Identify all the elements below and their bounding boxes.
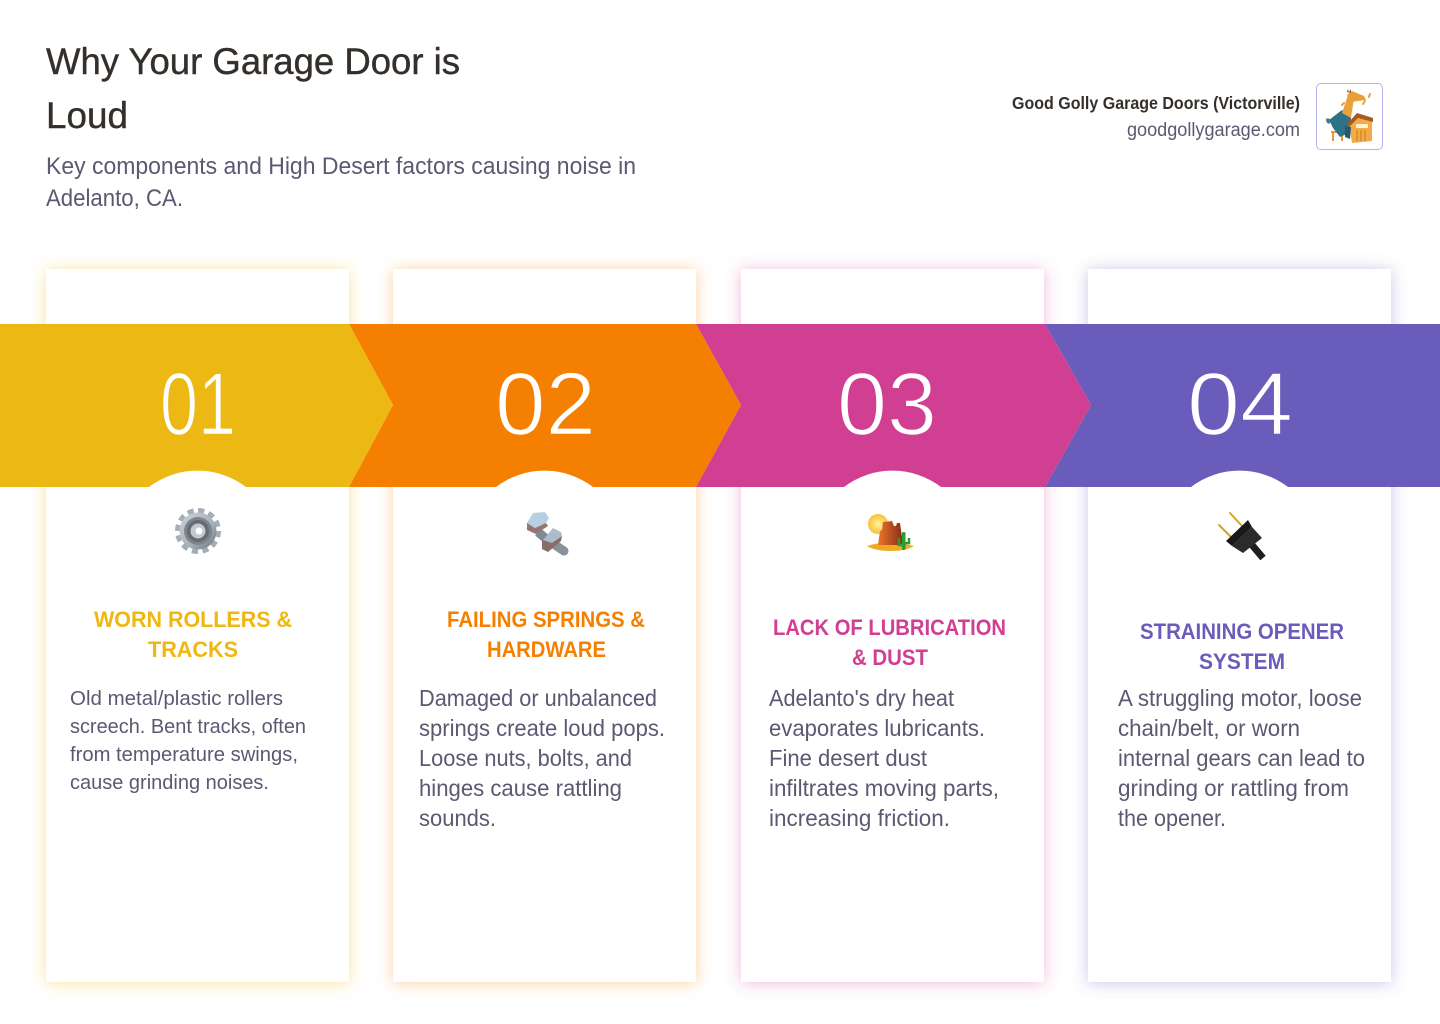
text: card 1 body (70, 687, 306, 794)
icon dome 2 (496, 471, 593, 487)
company name and website (1012, 93, 1300, 141)
text: card 3 body: increasing friction. (769, 805, 950, 831)
text: card 1 body: cause grinding noises. (70, 771, 269, 794)
heading: card 3: LACK OF LUBRICATION (773, 615, 1006, 640)
title: Loud (46, 95, 128, 136)
step number 03: 03 (837, 354, 937, 454)
icon dome 4 (1191, 471, 1288, 487)
text: card 4 body: chain/belt, or worn (1118, 715, 1300, 741)
heading: card 3: & DUST (852, 645, 929, 670)
text: card 1 body: screech. Bent tracks, often (70, 715, 306, 738)
text: card 2 body: Loose nuts, bolts, and (419, 745, 632, 771)
step number 01: 01 (160, 354, 236, 454)
panel: card 1 background (46, 269, 349, 982)
text: card 3 body: Fine desert dust (769, 745, 928, 771)
heading: card 1: TRACKS (148, 637, 238, 662)
arrow: step 3 band (696, 324, 1091, 487)
text: card 2 body: springs create loud pops. (419, 715, 665, 741)
icon: electrical plug (1219, 513, 1263, 558)
text: card 2 body (419, 685, 665, 831)
step number 02: 02 (495, 354, 596, 454)
text: card 3 body: evaporates lubricants. (769, 715, 985, 741)
heading: card 4: SYSTEM (1199, 649, 1285, 674)
icon dome 3 (844, 471, 941, 487)
heading: card 4: STRAINING OPENER (1140, 619, 1344, 644)
panel: card 3 background (741, 269, 1044, 982)
icon: desert butte with sun and cactus (867, 514, 914, 551)
company name and website: goodgollygarage.com (1127, 120, 1300, 141)
icon: gear (178, 511, 218, 551)
text: card 2 body: sounds. (419, 805, 496, 831)
text: card 4 body: A struggling motor, loose (1118, 685, 1362, 711)
text: card 1 body: Old metal/plastic rollers (70, 687, 283, 710)
heading: card 2: FAILING SPRINGS & (447, 607, 645, 632)
company name and website: Good Golly Garage Doors (Victorville) (1012, 93, 1300, 113)
subtitle (46, 153, 636, 212)
title (46, 41, 460, 136)
text: card 2 body: hinges cause rattling (419, 775, 622, 801)
heading: card 2: HARDWARE (487, 637, 606, 662)
heading: card 1: WORN ROLLERS & (94, 607, 292, 632)
arrow: step 4 band (1045, 324, 1440, 487)
icon dome 1 (149, 471, 246, 487)
subtitle: Key components and High Desert factors causing noise in (46, 153, 636, 180)
text: card 4 body: grinding or rattling from (1118, 775, 1349, 801)
heading: card 4 (1140, 619, 1344, 674)
step number 04: 04 (1187, 354, 1293, 454)
panel: card 4 background (1088, 269, 1391, 982)
arrow: step 1 band (0, 324, 393, 487)
text: card 1 body: from temperature swings, (70, 743, 298, 766)
icon: bolt and nut (527, 512, 564, 552)
text: card 3 body: infiltrates moving parts, (769, 775, 999, 801)
text: card 4 body: internal gears can lead to (1118, 745, 1365, 771)
text: card 4 body: the opener. (1118, 805, 1226, 831)
logo: giraffe and garage (1316, 84, 1382, 150)
subtitle: Adelanto, CA. (46, 185, 183, 212)
text: card 3 body: Adelanto's dry heat (769, 685, 955, 711)
text: card 2 body: Damaged or unbalanced (419, 685, 657, 711)
title: Why Your Garage Door is (46, 41, 460, 82)
panel: card 2 background (393, 269, 696, 982)
heading: card 2 (447, 607, 645, 662)
text: card 4 body (1118, 685, 1365, 831)
text: card 3 body (769, 685, 999, 831)
heading: card 3 (773, 615, 1006, 670)
arrow: step 2 band (349, 324, 741, 487)
heading: card 1 (94, 607, 292, 662)
